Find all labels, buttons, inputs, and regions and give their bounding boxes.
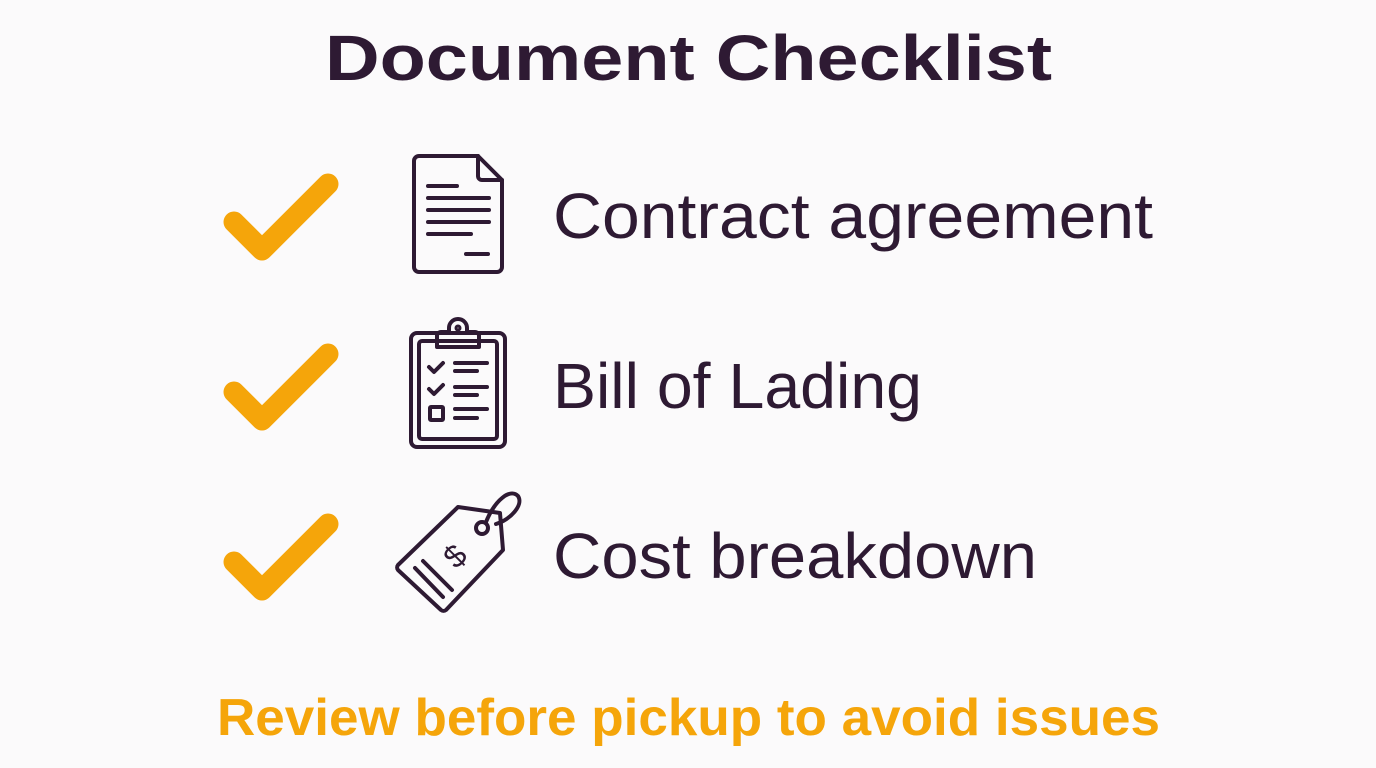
footer callout: Review before pickup to avoid issues (217, 689, 1160, 747)
row 3: cost breakdown (234, 494, 1037, 611)
label: cost breakdown: Cost breakdown (553, 520, 1037, 592)
icon: check 3 (234, 524, 328, 590)
label: contract agreement: Contract agreement (553, 180, 1153, 252)
icon: check 1 (234, 184, 328, 250)
icon: price tag (397, 494, 519, 611)
title: Document Checklist (325, 22, 1052, 94)
icon: document (414, 156, 502, 272)
row 2: bill of lading (234, 319, 922, 447)
row 1: contract agreement (234, 156, 1153, 272)
icon: check 2 (234, 354, 328, 420)
icon: clipboard (411, 319, 505, 447)
icon: price tag: $ (436, 537, 474, 575)
label: bill of lading: Bill of Lading (553, 350, 922, 422)
